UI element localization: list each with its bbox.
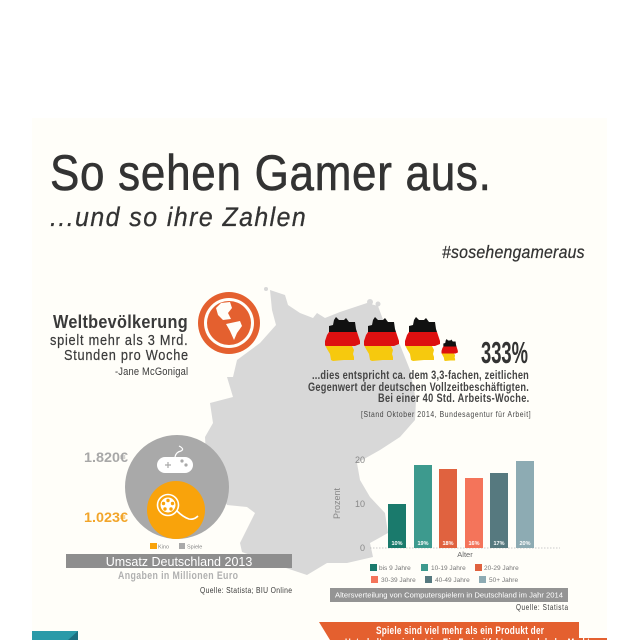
source: Statista; BIU Online: Quelle: Statista; BIU Online [200, 585, 292, 595]
legend: Kino / Spiele: Spiele [187, 544, 202, 550]
text block: Weltbevölkerung: spielt mehr als 3 Mrd. [50, 331, 188, 348]
title: So sehen Gamer aus. [50, 144, 491, 201]
text block: Vollzeit comparison [308, 370, 531, 419]
hashtag: #sosehengameraus [442, 242, 585, 262]
text block: Weltbevölkerung: Stunden pro Woche [64, 346, 188, 363]
bar chart: age distribution: 18% [442, 541, 454, 547]
bar chart: age distribution: 16% [468, 541, 480, 547]
text block: Vollzeit comparison: Bei einer 40 Std. Arbeits-Woche. [378, 393, 529, 405]
legend: age groups: 10-19 Jahre [431, 565, 466, 572]
bar chart: age distribution: 20 [355, 455, 365, 465]
caption bar: Altersverteilung: Altersverteilung von Computerspielern in Deutschland im Jahr 2014 [335, 590, 563, 600]
bar chart: age distribution [332, 455, 560, 559]
orange banner: Spiele sind viel mehr als ein Produkt der [376, 625, 544, 637]
source: Statista: Quelle: Statista [516, 602, 569, 612]
orange banner [319, 622, 607, 640]
text block: Weltbevölkerung [50, 311, 188, 378]
text block: Weltbevölkerung: -Jane McGonigal [115, 366, 188, 378]
bar chart: age distribution: 10 [355, 499, 365, 509]
note: Angaben in Millionen Euro: Angaben in Millionen Euro [118, 570, 238, 582]
bar chart: age distribution: 19% [417, 541, 429, 547]
bar chart: age distribution: 20% [519, 541, 531, 547]
bar chart: age distribution: Alter [457, 550, 473, 559]
bar chart: age distribution: Prozent [332, 487, 342, 519]
value: Spiele: 1.820€ [84, 449, 128, 465]
legend: age groups [370, 564, 519, 584]
icon: globe [198, 292, 260, 354]
legend: Kino / Spiele [150, 543, 202, 550]
value: Kino: 1.023€ [84, 509, 128, 525]
bar chart: age distribution: 17% [493, 541, 505, 547]
legend: age groups: 20-29 Jahre [484, 565, 519, 572]
legend: age groups: 50+ Jahre [489, 577, 518, 584]
legend: age groups: bis 9 Jahre [379, 565, 411, 572]
legend: age groups: 30-39 Jahre [381, 577, 416, 584]
legend: age groups: 40-49 Jahre [435, 577, 470, 584]
heading bar: Umsatz Deutschland 2013: Umsatz Deutschland 2013 [106, 555, 252, 569]
bar chart: age distribution: 10% [391, 541, 403, 547]
icon: film reel [158, 494, 198, 519]
subtitle: ...und so ihre Zahlen [50, 203, 306, 232]
heading bar: Umsatz Deutschland 2013 [66, 554, 292, 569]
map of Germany [205, 287, 416, 575]
circle chart: Umsatz [125, 435, 229, 539]
bar chart: age distribution: 0 [360, 543, 365, 553]
text block: Vollzeit comparison: ...dies entspricht ca. dem 3,3-fachen, zeitlichen [312, 370, 529, 382]
big number 333%: 333% [481, 335, 528, 370]
text block: Vollzeit comparison: Gegenwert der deutschen Vollzeitbeschäftigten. [308, 382, 529, 394]
icon row: German flag maps [324, 317, 458, 362]
icon: gamepad [157, 446, 193, 473]
caption bar: Altersverteilung [330, 588, 568, 602]
legend: Kino / Spiele: Kino [158, 544, 169, 550]
text block: Weltbevölkerung: Weltbevölkerung [53, 311, 188, 332]
cream background panel [32, 118, 607, 640]
text block: Vollzeit comparison: [Stand Oktober 2014, Bundesagentur für Arbeit] [361, 409, 531, 419]
teal corner block [32, 631, 78, 640]
